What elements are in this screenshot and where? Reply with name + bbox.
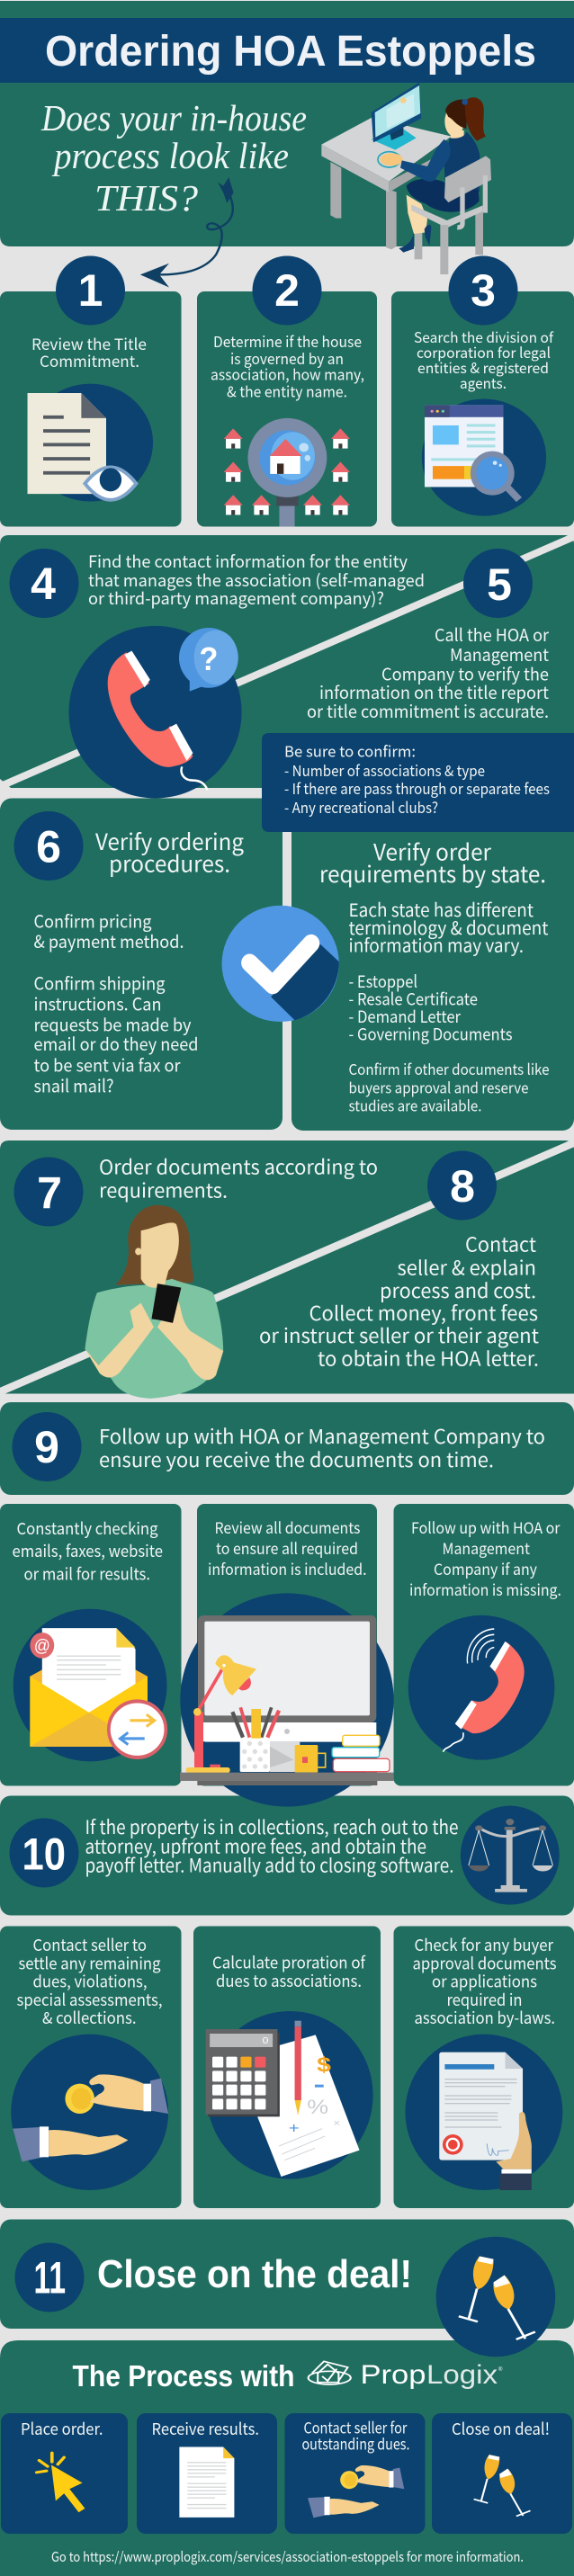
text: review documents (208, 1516, 367, 1579)
text: step 5: Call the HOA or (435, 622, 550, 647)
icon: scales (461, 1806, 560, 1905)
badge 5 (463, 549, 533, 618)
script question: process look like (51, 135, 289, 176)
badge 8: 8 (450, 1161, 475, 1212)
text: search: Search the division of (414, 326, 554, 347)
icon: ringing phone (408, 1615, 554, 1760)
title band: Ordering HOA Estoppels (45, 28, 536, 76)
text: buyer approval (412, 1933, 556, 2029)
text: step 8: Collect money, front fees (309, 1298, 538, 1327)
badge 9: 9 (34, 1422, 59, 1472)
text: determine: Determine if the house (213, 330, 362, 352)
callout: be sure to confirm (262, 733, 574, 832)
logo: proplogix: ® (498, 2366, 503, 2373)
text: review documents: to ensure all required (216, 1536, 358, 1559)
text: step 8: or instruct seller or their agent (259, 1320, 539, 1349)
icon: browser with magnifier (422, 398, 546, 516)
text: determine: & the entity name. (227, 380, 347, 401)
icon: phone with question bubble (68, 626, 242, 798)
heading: verify order: Verify order (373, 835, 491, 867)
icon: calculator and paper: % (307, 2097, 328, 2118)
callout: be sure to confirm: - Any recreational clubs? (284, 796, 438, 818)
heading: verify ordering (95, 825, 244, 880)
text: ordering procedures: & payment method. (34, 927, 184, 953)
panel: follow up (394, 1504, 574, 1786)
text: contact seller: Contact seller to (32, 1933, 147, 1956)
badge 4: 4 (31, 559, 56, 609)
text: buyer approval: association by-laws. (414, 2006, 555, 2029)
card: place order (1, 2413, 128, 2534)
icon: phone with question bubble: ? (199, 641, 218, 678)
text: step 5: information on the title report (319, 680, 549, 704)
icon: document with eye (28, 384, 153, 502)
card: receive results: Receive results. (151, 2417, 259, 2440)
panel: step 10 (0, 1795, 574, 1916)
callout: be sure to confirm: Be sure to confirm: (284, 739, 416, 761)
text: other documents: buyers approval and reserve (349, 1076, 529, 1097)
text: step 7 (99, 1151, 378, 1203)
card: contact seller (284, 2413, 425, 2534)
icon: check mark (222, 906, 339, 1022)
text: contact seller: special assessments, (16, 1988, 162, 2011)
text: checking: or mail for results. (23, 1561, 150, 1585)
text: other documents (349, 1058, 549, 1115)
card: contact seller: Contact seller for (304, 2416, 408, 2437)
text: review documents: Review all documents (214, 1516, 361, 1538)
logo: proplogix: Logix (426, 2360, 498, 2390)
panel: buyer approval documents (394, 1927, 574, 2208)
panel: step 3 (391, 255, 574, 527)
heading: verify ordering: Verify ordering (95, 825, 244, 857)
icon: signed document in hand (405, 2035, 562, 2190)
text: contact seller: dues, violations, (32, 1970, 148, 1993)
text: proration: Calculate proration of (212, 1950, 366, 1973)
title band (0, 18, 574, 83)
badge 1: 1 (78, 265, 103, 316)
icon: curly arrow (140, 177, 234, 288)
text: ordering procedures: snail mail? (34, 1072, 113, 1097)
badge 11: 11 (34, 2252, 66, 2303)
heading: verify ordering: procedures. (109, 847, 230, 880)
heading: close on the deal: Close on the deal! (97, 2252, 412, 2296)
text: ordering procedures: to be sent via fax or (34, 1051, 181, 1078)
callout: be sure to confirm: - If there are pass through or separate fees (284, 777, 550, 799)
card: place order: Place order. (21, 2417, 103, 2440)
text: determine (211, 330, 364, 401)
text: step 8: Contact (465, 1229, 536, 1257)
card: contact seller: outstanding dues. (302, 2432, 410, 2454)
illustration: woman at desk (321, 83, 491, 274)
badge 10 (9, 1819, 79, 1887)
list: document types: - Demand Letter (349, 1005, 462, 1028)
text: search: entities & registered (417, 356, 549, 378)
icon: calculator and paper: $ (317, 2053, 332, 2077)
panel: steps 7 and 8 (0, 1140, 574, 1399)
text: buyer approval: approval documents (412, 1952, 556, 1975)
text: contact seller (16, 1933, 162, 2029)
text: step 5 (307, 622, 550, 723)
panel: order requirements by state (291, 792, 574, 1131)
badge 3: 3 (471, 265, 496, 316)
script question: THIS? (94, 177, 199, 219)
icon: hands and coin (11, 2035, 168, 2190)
script question (40, 97, 307, 219)
text: step 4: or third-party management company)? (88, 586, 384, 610)
icon: champagne glasses (436, 2237, 555, 2357)
icon: envelope (13, 1609, 167, 1761)
panel: calculate proration (193, 1927, 381, 2208)
text: follow up (409, 1516, 561, 1600)
panel: review documents (180, 1504, 394, 1807)
text: checking: emails, faxes, website (13, 1539, 163, 1562)
text: step 4 (88, 550, 425, 610)
icon: envelope: @ (34, 1635, 50, 1655)
text: step 10: If the property is in collections, reach out to the (85, 1813, 459, 1840)
text: review: Commitment. (40, 349, 139, 371)
badge 11 (14, 2243, 85, 2312)
text: other documents: Confirm if other documents like (349, 1058, 549, 1079)
text: checking (13, 1516, 163, 1585)
text: step 7: requirements. (99, 1175, 228, 1203)
text: ordering procedures: email or do they need (34, 1030, 198, 1056)
badge 1 (56, 255, 125, 326)
text: determine: association, how many, (211, 363, 364, 385)
text: ordering procedures: Confirm shipping (34, 970, 166, 995)
text: step 8: to obtain the HOA letter. (318, 1344, 539, 1373)
list: document types: - Governing Documents (349, 1022, 513, 1045)
icon: calculator and paper: × (333, 2117, 340, 2129)
panel: contact seller to settle (0, 1927, 182, 2208)
list: document types (349, 970, 513, 1045)
badge 6 (14, 811, 83, 881)
badge 9 (13, 1412, 81, 1481)
illustration: woman with phone (85, 1205, 223, 1399)
text: buyer approval: or applications (432, 1970, 537, 1993)
text: contact seller: settle any remaining (18, 1952, 160, 1975)
callout: be sure to confirm: - Number of associations & type (284, 759, 485, 781)
heading: verify order (319, 835, 546, 890)
panel: constantly checking (0, 1504, 182, 1786)
script question: Does your in-house (40, 97, 307, 139)
text: step 10 (85, 1813, 459, 1878)
heading: the process: The Process with (72, 2359, 295, 2393)
panel: step 2 (197, 255, 377, 527)
icon: calculator and paper: + (289, 2119, 300, 2136)
text: state differences (349, 896, 549, 957)
badge 3 (448, 255, 518, 326)
text: step 9 (99, 1421, 545, 1473)
panel: the process with proplogix (0, 2340, 574, 2576)
badge 8 (427, 1151, 497, 1220)
text: follow up: Management (443, 1536, 531, 1559)
badge 7 (14, 1157, 83, 1227)
text: contact seller: & collections. (42, 2006, 137, 2029)
text: ordering procedures (34, 907, 198, 1097)
text: proration: dues to associations. (216, 1969, 362, 1992)
text: step 4: Find the contact information for the entity (88, 550, 408, 573)
badge 2: 2 (274, 265, 300, 316)
logo: proplogix (309, 2360, 503, 2390)
text: checking: Constantly checking (16, 1516, 158, 1540)
badge 6: 6 (36, 822, 61, 872)
text: step 7: Order documents according to (99, 1151, 378, 1180)
text: determine: is governed by an (230, 347, 344, 369)
card: close on deal (432, 2413, 572, 2534)
list: document types: - Resale Certificate (349, 988, 478, 1011)
icon: magnifier over houses (224, 418, 350, 526)
text: step 10: attorney, upfront more fees, and obtain the (85, 1833, 426, 1860)
card: close on deal: Close on deal! (452, 2417, 550, 2440)
text: review documents: information is included. (208, 1557, 367, 1579)
panel: step 11 (0, 2220, 574, 2357)
text: follow up: Follow up with HOA or (411, 1516, 561, 1538)
panel: step 6 (0, 799, 283, 1130)
logo: proplogix: Prop (360, 2360, 426, 2390)
text: state differences: Each state has different (349, 896, 534, 922)
text: search (414, 326, 554, 393)
text: step 8: seller & explain (398, 1252, 536, 1281)
text: follow up: Company if any (434, 1557, 537, 1579)
illustration: desk with monitor (180, 1593, 394, 1807)
badge 10: 10 (22, 1829, 66, 1880)
text: step 9: ensure you receive the documents on time. (99, 1445, 494, 1473)
text: buyer approval: Check for any buyer (414, 1933, 554, 1956)
text: step 4: that manages the association (self-managed (88, 568, 425, 592)
panel: step 9 (0, 1402, 574, 1495)
text: other documents: studies are available. (349, 1094, 482, 1115)
text: step 8 (259, 1229, 539, 1373)
heading: verify order: requirements by state. (319, 857, 546, 890)
text: step 8: process and cost. (380, 1275, 536, 1304)
text: ordering procedures: Confirm pricing (34, 907, 151, 934)
text: follow up: information is missing. (409, 1578, 561, 1600)
text: review: Review the Title (31, 332, 147, 354)
text: ordering procedures: requests be made by (34, 1011, 191, 1036)
badge 7: 7 (37, 1167, 62, 1218)
panel: steps 4 and 5 (0, 534, 574, 832)
text: step 5: Management (450, 642, 549, 666)
text: step 9: Follow up with HOA or Management Company to (99, 1421, 545, 1450)
text: ordering procedures: instructions. Can (34, 989, 162, 1016)
card: receive results (137, 2413, 277, 2534)
text: step 5: Company to verify the (381, 662, 549, 685)
panel: step 1 (0, 255, 182, 527)
text: step 10: payoff letter. Manually add to closing software. (85, 1851, 453, 1878)
text: search: corporation for legal (417, 341, 551, 362)
text: search: agents. (460, 371, 507, 393)
text: proration (212, 1950, 366, 1992)
text: state differences: information may vary. (349, 932, 524, 957)
text: state differences: terminology & document (349, 914, 549, 940)
icon: calculator and paper (206, 2011, 373, 2179)
text: step 5: or title commitment is accurate. (307, 699, 549, 723)
badge 4 (9, 549, 79, 618)
text: buyer approval: required in (446, 1988, 522, 2011)
icon: calculator and paper: 0 (263, 2036, 268, 2046)
list: document types: - Estoppel (349, 970, 417, 993)
badge 5: 5 (487, 559, 512, 610)
badge 2 (252, 255, 322, 326)
hero panel (0, 1, 574, 288)
text: review (31, 332, 147, 371)
